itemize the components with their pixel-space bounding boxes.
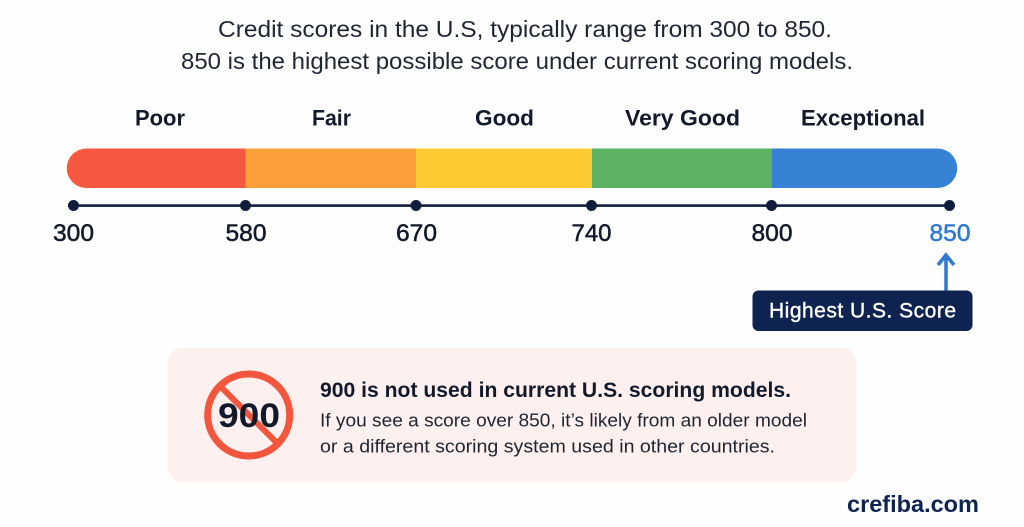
category labels: Good <box>475 106 534 130</box>
category labels: Very Good <box>625 106 740 130</box>
brand website: crefiba.com <box>847 491 979 517</box>
icon: prohibited 900: 900 <box>218 397 280 435</box>
arrow to 850 <box>938 255 954 291</box>
category labels: Exceptional <box>801 106 925 130</box>
panel heading: 900 is not used in current U.S. scoring models. <box>320 379 791 402</box>
panel body text <box>320 410 807 456</box>
score numbers: 740 <box>572 220 612 247</box>
category labels: Fair <box>312 106 351 130</box>
score numbers <box>53 220 792 247</box>
highest score callout: Highest U.S. Score <box>769 300 956 322</box>
panel: 900 not used <box>168 348 856 482</box>
score numbers: 300 <box>53 220 94 247</box>
score scale axis <box>68 200 955 211</box>
icon: prohibited 900 <box>208 374 290 456</box>
intro text: Credit scores in the U.S, typically range from 300 to 850. <box>218 16 832 42</box>
panel body text: or a different scoring system used in other countries. <box>320 436 775 456</box>
category labels <box>135 106 925 130</box>
category labels: Poor <box>135 106 185 130</box>
score numbers: 800 <box>752 220 792 247</box>
highest score callout <box>752 290 972 331</box>
panel body text: If you see a score over 850, it’s likely from an older model <box>320 410 807 430</box>
score numbers: 670 <box>396 220 437 247</box>
highest score number: 850 <box>930 220 970 247</box>
credit score color bar <box>67 148 957 188</box>
intro text <box>181 16 853 74</box>
score numbers: 580 <box>226 220 266 247</box>
intro text: 850 is the highest possible score under current scoring models. <box>181 48 853 74</box>
